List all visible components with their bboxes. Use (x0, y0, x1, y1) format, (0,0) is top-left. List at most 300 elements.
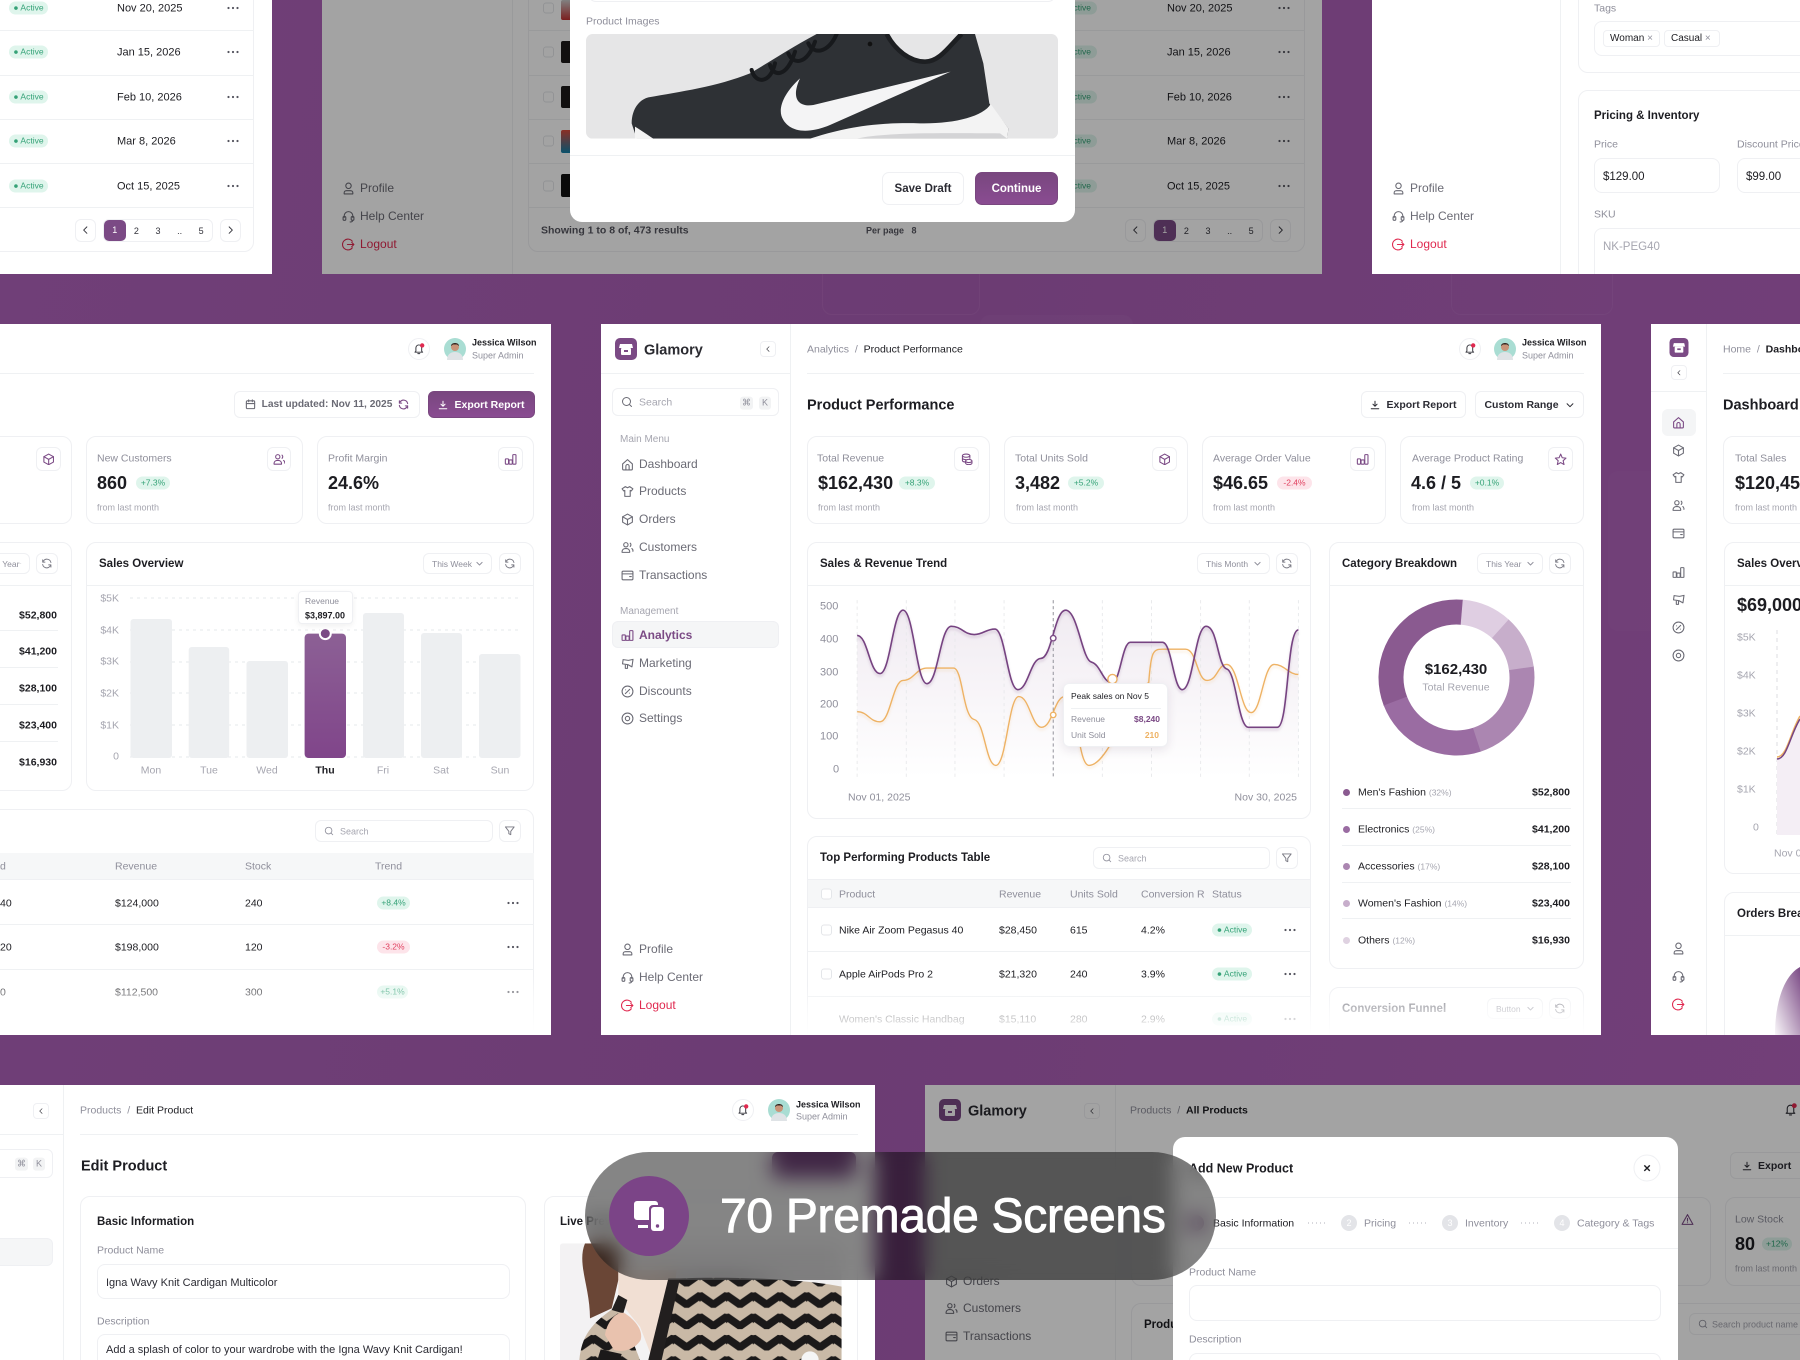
heading: Conversion Funnel: Conversion Funnel (1342, 1003, 1446, 1015)
step 4 marker (1554, 1215, 1570, 1231)
table row: $112,500 (115, 987, 158, 999)
input: description (1189, 1353, 1661, 1360)
table row: 20 (0, 942, 12, 954)
panel: category list clipped (0, 542, 72, 791)
image: black running shoe (586, 34, 1058, 139)
row menu (227, 96, 239, 98)
icon: chart (498, 447, 523, 471)
step 4 label: Category & Tags (1577, 1218, 1654, 1230)
value: $52,800 (19, 610, 57, 622)
label: Tags: Tags (1594, 3, 1616, 15)
dropdown: This Week (423, 553, 492, 574)
notification bell (732, 1099, 754, 1121)
button: Continue: Continue (992, 182, 1041, 194)
menu item: Orders (622, 512, 676, 526)
KPI value: 80 (1735, 1234, 1755, 1254)
table row: Apple AirPods Pro 2: $21,320 (999, 969, 1037, 981)
table header row: d (0, 861, 6, 873)
button: Export Report (428, 391, 535, 418)
bar chart: weekly sales (130, 598, 520, 758)
panel: Top Performing Products (807, 836, 1311, 1096)
KPI change: +5.2% (1074, 478, 1098, 488)
status badge: ● Active (1061, 46, 1091, 56)
date: Feb 10, 2026 (117, 91, 182, 103)
line chart clipped (1770, 630, 1800, 840)
KPI value: 4.6 / 5 (1411, 473, 1461, 493)
logo (615, 338, 637, 360)
status badge (1058, 90, 1097, 104)
button hidden behind pill (772, 1152, 856, 1178)
sidebar item: Help Center: Help Center (1410, 209, 1474, 223)
step 1 marker (1188, 1215, 1204, 1231)
table header row: Stock (245, 861, 271, 873)
icon: logout (1672, 998, 1685, 1011)
pagination pages: 1 (112, 225, 117, 235)
card: pricing and inventory (1578, 90, 1800, 310)
axis labels: $5K (1737, 632, 1756, 644)
panel: Orders Breakdown (1724, 892, 1800, 1092)
KPI change: +8.3% (905, 478, 929, 488)
table row: Apple AirPods Pro 2: ● Active (1217, 968, 1247, 978)
legend row: Women's Fashion: $23,400 (1532, 898, 1570, 910)
notification bell (408, 338, 430, 360)
axis label: 300 (820, 666, 838, 678)
avatar (444, 338, 466, 360)
modal: Add New Product (1173, 1137, 1678, 1360)
table row: 240 (245, 898, 263, 910)
KPI change (1762, 1238, 1792, 1250)
chart tooltip (1063, 683, 1168, 747)
icon: home (1673, 417, 1684, 428)
button: Save Draft: Save Draft (895, 182, 951, 194)
chart tooltip: 210 (1145, 730, 1159, 740)
section label: Main Menu: Main Menu (620, 434, 669, 445)
table header row: Revenue (999, 889, 1041, 901)
status badge (1058, 46, 1097, 58)
KPI note: from last month (97, 503, 159, 513)
status badge: ● Active (13, 180, 44, 190)
refresh button (1549, 553, 1571, 574)
dropdown: This Month: This Month (1206, 558, 1248, 568)
menu item: Logout (621, 998, 676, 1012)
table row (0, 881, 534, 925)
menu item: Logout: Logout (639, 998, 676, 1012)
sidebar search clipped: ⌘ (17, 1159, 26, 1169)
button: Continue (975, 172, 1058, 205)
heading text: 70 Premade Screens (720, 1190, 1166, 1243)
sidebar item: Profile (1394, 181, 1444, 195)
active icon highlight (1662, 409, 1696, 436)
chart tooltip: $3,897.00 (305, 611, 345, 621)
menu item: Marketing: Marketing (639, 656, 692, 670)
sidebar item: Logout (1392, 237, 1447, 251)
pagination pages (103, 219, 213, 242)
KPI card: Total Revenue (807, 436, 990, 524)
card: tags (1578, 0, 1800, 73)
KPI change (136, 476, 170, 490)
table row: Nike Air Zoom Pegasus 40 (808, 908, 1310, 952)
collapse button (1671, 365, 1687, 380)
day label: Sun (491, 765, 509, 777)
icon: star (1548, 447, 1573, 471)
pagination pages: 2 (1184, 226, 1189, 236)
table row: $198,000 (115, 942, 159, 954)
day label: Tue (200, 765, 218, 777)
heading: Basic Information: Basic Information (97, 1216, 194, 1228)
step 3 marker: 3 (1447, 1218, 1452, 1228)
panel: top-left orders table crop (0, 0, 272, 274)
axis label: $2K (1737, 746, 1756, 758)
status badge: ● Active (13, 46, 44, 56)
legend row: Others: $16,930 (1532, 935, 1570, 947)
dropdown: This Month (1197, 553, 1270, 574)
icon: users (267, 447, 291, 471)
KPI note: from last month (1016, 503, 1078, 513)
table row: Apple AirPods Pro 2: Apple AirPods Pro 2 (839, 969, 933, 981)
axis label: $4K (1737, 670, 1756, 682)
row menu (227, 6, 239, 10)
table row: Nike Air Zoom Pegasus 40: ● Active (1217, 924, 1247, 934)
table header row: Revenue (115, 861, 157, 873)
KPI change: +7.3% (141, 478, 165, 488)
step 4 marker: 4 (1559, 1218, 1564, 1228)
label: SKU: SKU (1594, 209, 1616, 221)
input: price (1594, 158, 1720, 193)
KPI value: 3,482 (1015, 473, 1060, 493)
icon: chart (1672, 566, 1685, 579)
menu item: Customers (945, 1294, 1021, 1322)
table header row: Trend (375, 861, 402, 873)
refresh button (1549, 998, 1571, 1019)
day label: Wed (256, 765, 278, 777)
heading: Products: Products (1144, 1319, 1194, 1331)
KPI card clipped (1131, 1197, 1711, 1286)
row menu (227, 184, 239, 188)
axis label: 200 (820, 698, 838, 710)
table search: Search (1118, 854, 1147, 864)
input: SKU (1594, 228, 1800, 288)
day label: Thu (315, 765, 335, 777)
card: Live preview (544, 1196, 858, 1360)
status badge (9, 90, 48, 104)
pagination pages: .. (1227, 226, 1232, 236)
input: discount price: $99.00 (1746, 171, 1781, 183)
refresh button (1276, 553, 1298, 574)
KPI note: from last month (1412, 503, 1474, 513)
tag: Casual: Casual × (1671, 33, 1711, 44)
date: Nov 20, 2025 (1167, 2, 1232, 14)
heading: Live Preview: Live Preview (560, 1216, 630, 1228)
input: price: $129.00 (1603, 171, 1645, 183)
menu item: Products: Products (639, 484, 686, 498)
pagination previous (75, 219, 96, 242)
table row: Nike Air Zoom Pegasus 40: Nike Air Zoom Pegasus 40 (839, 925, 963, 937)
KPI change (899, 476, 935, 490)
status badge: ● Active (1061, 2, 1091, 12)
menu item: Settings: Settings (639, 711, 682, 725)
icon: card (1672, 527, 1685, 540)
heading: Pricing & Inventory: Pricing & Inventory (1594, 110, 1699, 122)
legend row: Accessories: Accessories (17%) (1358, 861, 1440, 873)
table row (0, 986, 518, 999)
date: Oct 15, 2025 (117, 180, 180, 192)
row menu (227, 50, 239, 54)
collapse button (33, 1103, 49, 1119)
notification bell (1459, 338, 1481, 360)
input: SKU: NK-PEG40 (1603, 241, 1660, 253)
panel: add product screen with modal (925, 1085, 1800, 1360)
step 1 marker: 1 (1193, 1218, 1198, 1228)
last updated control: Last updated: Nov 11, 2025 (262, 399, 392, 410)
table row: 0 (0, 987, 6, 999)
KPI change: +0.1% (1475, 478, 1499, 488)
legend row: Accessories (1342, 849, 1571, 883)
KPI change: +12% (1766, 1238, 1788, 1248)
button: Custom Range: Custom Range (1484, 398, 1559, 410)
donut value: $162,430 (1425, 661, 1487, 678)
collapse button (1084, 1103, 1100, 1119)
page title: Product Performance (807, 397, 954, 413)
pagination next (1270, 219, 1291, 242)
last updated control (234, 391, 420, 418)
date label end: Nov 30, 2025 (1235, 792, 1297, 804)
step connector: ····· (1520, 1218, 1540, 1228)
input: description: Add a splash of color to your wardrobe with the Igna Wavy Knit Cardigan! (106, 1344, 463, 1356)
pagination pages: 5 (199, 226, 204, 236)
step 2 marker (1341, 1215, 1357, 1231)
label: Price: Price (1594, 139, 1618, 151)
user name: Jessica Wilson (796, 1100, 860, 1110)
menu item: Transactions: Transactions (963, 1329, 1031, 1343)
table header row: Units Sold (1070, 889, 1118, 901)
pagination pages: 3 (155, 226, 160, 236)
axis label: $1K (1737, 784, 1756, 796)
panel: Conversion Funnel (1329, 987, 1584, 1087)
status badge (9, 180, 48, 192)
date: Jan 15, 2026 (1167, 46, 1231, 58)
menu item: Orders (945, 1267, 1000, 1295)
heading: Sales Overview: Sales Overview (99, 558, 183, 570)
icon: help (1672, 970, 1685, 983)
menu item: Customers: Customers (639, 540, 697, 554)
icon: coins (954, 447, 979, 471)
icon: shirt (1672, 471, 1685, 484)
button: Export Report (1361, 391, 1466, 418)
KPI label: Total Units Sold (1015, 453, 1088, 465)
sidebar item: Profile (344, 181, 394, 195)
heading: Category Breakdown: Category Breakdown (1342, 558, 1457, 570)
icon: discount (1672, 621, 1685, 634)
refresh button (499, 553, 521, 574)
heading: Sales & Revenue Trend: Sales & Revenue Trend (820, 558, 947, 570)
panel: top-right edit product form crop (1372, 0, 1800, 274)
panel: Sales & Revenue Trend (807, 542, 1311, 819)
panel: top-centre product screen behind modal (322, 0, 1322, 274)
day label: Sat (433, 765, 449, 777)
step 3 label: Inventory (1465, 1218, 1508, 1230)
icon: warning (1681, 1213, 1694, 1226)
results count: Showing 1 to 8 of, 473 results (541, 225, 689, 237)
table row: +5.1% (380, 986, 405, 996)
button: Save Draft (882, 172, 964, 205)
axis label: $5K (100, 593, 119, 605)
filter button (1276, 847, 1298, 869)
menu item: Discounts: Discounts (639, 684, 692, 698)
button: Export (1730, 1152, 1800, 1179)
table row: Women's Classic Handbag: 280 (1070, 1014, 1088, 1026)
breadcrumb: Analytics / Product Performance (807, 344, 963, 356)
table search: Search product name (1712, 1320, 1798, 1330)
KPI card: Average Product Rating (1400, 436, 1584, 524)
menu item: Transactions: Transactions (639, 568, 707, 582)
refresh button (36, 553, 58, 574)
table row: 300 (245, 987, 263, 999)
chart tooltip: Revenue (305, 596, 339, 606)
icon: box (1672, 444, 1685, 457)
date: Mar 8, 2026 (1167, 135, 1226, 147)
table row: -3.2% (382, 942, 405, 952)
table search: Search (340, 827, 369, 837)
panel: Category Breakdown (1329, 542, 1584, 969)
KPI label: Low Stock (1735, 1214, 1783, 1226)
step connector: ····· (1307, 1218, 1327, 1228)
legend row: Women's Fashion: Women's Fashion (14%) (1358, 898, 1467, 910)
sidebar search: Search (639, 397, 672, 409)
icon: devices (609, 1176, 689, 1256)
input: product name (1189, 1285, 1661, 1321)
axis label: 500 (820, 600, 838, 612)
table row: Nike Air Zoom Pegasus 40: $28,450 (999, 925, 1037, 937)
modal title: Add New Product (1189, 1162, 1293, 1176)
row menu (1278, 96, 1290, 98)
table search (315, 820, 493, 842)
date: Oct 15, 2025 (1167, 180, 1230, 192)
KPI label: Average Order Value (1213, 453, 1311, 465)
menu item: Dashboard: Dashboard (639, 457, 698, 471)
table row: $124,000 (115, 898, 159, 910)
panel: far-right collapsed dashboard crop (1651, 324, 1800, 1035)
table row: Women's Classic Handbag (839, 1012, 1296, 1026)
panel: analytics dashboard left crop (0, 324, 551, 1035)
KPI change (1470, 476, 1504, 490)
row menu (227, 140, 239, 142)
user role: Super Admin (796, 1112, 848, 1122)
table row: Women's Classic Handbag: Women's Classic Handbag (839, 1014, 965, 1026)
axis label: $4K (100, 625, 119, 637)
logo (1670, 338, 1688, 357)
user name: Jessica Wilson (472, 338, 536, 348)
menu item: Orders: Orders (963, 1274, 1000, 1288)
label: Product Name: Product Name (1189, 1267, 1256, 1279)
dropdown clipped (0, 553, 30, 574)
KPI change: -2.4% (1283, 478, 1306, 488)
menu item: Profile: Profile (639, 942, 673, 956)
sidebar search (612, 388, 779, 416)
breadcrumb: Products / Edit Product (80, 1105, 193, 1117)
pagination pages: 5 (1249, 226, 1254, 236)
KPI label: Average Product Rating (1412, 453, 1523, 465)
KPI card clipped (0, 436, 72, 524)
KPI note: from last month (818, 503, 880, 513)
panel: edit product screen (0, 1085, 875, 1360)
products table card (1131, 1303, 1800, 1360)
card: Basic Information (80, 1196, 526, 1360)
sidebar item: Help Center: Help Center (360, 209, 424, 223)
row menu (1278, 140, 1290, 142)
sidebar search clipped (0, 1149, 53, 1178)
close button (1634, 1154, 1660, 1182)
pagination pages: .. (177, 226, 182, 236)
axis label: $3K (100, 656, 119, 668)
panel: products table (0, 809, 534, 1069)
table row: Apple AirPods Pro 2 (808, 952, 1310, 997)
KPI card: Profit Margin (317, 436, 534, 524)
legend row: Electronics: Electronics (25%) (1358, 824, 1435, 836)
axis label: $3K (1737, 708, 1756, 720)
KPI card: Total Sales (1723, 436, 1800, 524)
table row: Women's Classic Handbag: 2.9% (1141, 1014, 1165, 1026)
input: product name: Igna Wavy Knit Cardigan Multicolor (106, 1277, 277, 1289)
table row: Apple AirPods Pro 2: 3.9% (1141, 969, 1165, 981)
KPI card: New Customers (86, 436, 303, 524)
dropdown: Button (1487, 998, 1543, 1019)
tag: Woman (1603, 30, 1660, 47)
status badge: ● Active (13, 2, 44, 12)
KPI label: Total Sales (1735, 453, 1786, 465)
KPI card: Total Units Sold (1004, 436, 1188, 524)
tag: Woman: Woman × (1610, 33, 1653, 44)
icon: settings (1672, 649, 1685, 662)
panel: Sales Overview (86, 542, 534, 791)
table header row: Conversion R (1141, 889, 1205, 901)
pagination previous (1125, 219, 1146, 242)
notification bell (1784, 1103, 1797, 1116)
status badge: ● Active (13, 136, 44, 146)
image: woman in zigzag cardigan (560, 1230, 842, 1360)
breadcrumb: Products / All Products (1130, 1105, 1248, 1117)
legend row: Electronics: $41,200 (1532, 824, 1570, 836)
avatar (768, 1099, 790, 1121)
sidebar search: ⌘ (742, 398, 751, 408)
axis label: 0 (1753, 822, 1759, 834)
menu item: Orders: Orders (639, 512, 676, 526)
status badge: ● Active (1061, 136, 1091, 146)
axis label: 400 (820, 633, 838, 645)
KPI value: $162,430 (818, 473, 893, 493)
axis label: $2K (100, 688, 119, 700)
chart tooltip: $8,240 (1134, 714, 1160, 724)
KPI note: from last month (1735, 1264, 1797, 1274)
icon: users (1672, 499, 1685, 512)
button: Export Report: Export Report (1386, 398, 1456, 410)
icon: profile (1672, 942, 1685, 955)
badge: 70 Premade Screens pill (585, 1152, 1216, 1280)
legend row: Men's Fashion: $52,800 (1532, 787, 1570, 799)
table row: Nike Air Zoom Pegasus 40: 4.2% (1141, 925, 1165, 937)
KPI value: 24.6% (328, 473, 379, 493)
menu item: Profile (622, 942, 673, 956)
axis label: 100 (820, 730, 838, 742)
avatar (1494, 338, 1516, 360)
table row (0, 925, 534, 970)
value: $16,930 (19, 757, 57, 769)
menu item: Customers: Customers (963, 1301, 1021, 1315)
date: Jan 15, 2026 (117, 46, 181, 58)
legend row: Others (1343, 935, 1570, 947)
status badge (1058, 2, 1097, 14)
legend row: Electronics (1342, 812, 1571, 846)
step 2 marker: 2 (1346, 1218, 1352, 1228)
